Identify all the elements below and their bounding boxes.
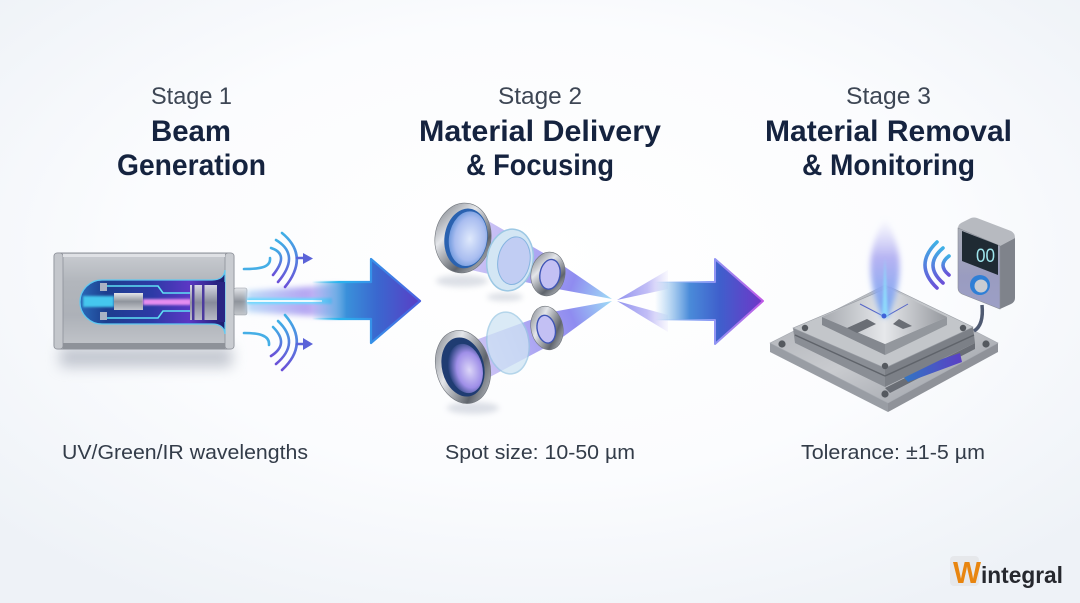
- caption: stage 2: Spot size: 10-50 µm: [445, 442, 635, 464]
- base plate: [770, 285, 998, 412]
- stage 1 heading: Beam: [151, 115, 231, 148]
- logo: Wintegral: [950, 555, 1063, 590]
- caption: stage 3: Tolerance: ±1-5 µm: [801, 442, 985, 464]
- laser cavity window: [80, 270, 225, 334]
- arrow 1: [312, 259, 420, 343]
- stage 3 heading: [765, 83, 1012, 182]
- laser housing: [54, 253, 234, 349]
- lower large lens: [428, 325, 498, 409]
- device body: [958, 218, 1015, 309]
- stage 2 heading: [419, 83, 661, 182]
- lower middle lens: [483, 309, 533, 377]
- device cable: [974, 305, 982, 331]
- stage 2 heading: Stage 2: [498, 83, 582, 110]
- stage 3 heading: Material Removal: [765, 115, 1012, 148]
- blue display strip: [900, 353, 962, 382]
- device screen: 00: [976, 246, 995, 267]
- stage 3 heading: Stage 3: [846, 83, 931, 110]
- stage 1 heading: Generation: [117, 149, 266, 182]
- focusing optics icon: [428, 199, 612, 414]
- laser housing shadow: [60, 347, 232, 367]
- material removal stage icon: [770, 218, 998, 412]
- lower small lens: [527, 303, 567, 353]
- monitoring device: [958, 218, 1015, 331]
- upper small lens: [527, 249, 569, 299]
- device knob: [970, 275, 990, 295]
- output beam: [247, 284, 345, 318]
- laser source icon: [54, 253, 247, 367]
- icon: upper wave emitter: [244, 233, 313, 287]
- lens shadows: [436, 275, 523, 414]
- upper beam path: [462, 208, 612, 299]
- middle plate: [793, 287, 975, 387]
- caption: stage 1: UV/Green/IR wavelengths: [62, 442, 308, 464]
- upper middle lens: [482, 225, 538, 295]
- stage 2 heading: & Focusing: [466, 149, 614, 182]
- gap shadow under middle plate: [885, 343, 975, 393]
- workpiece block: [822, 288, 947, 355]
- icon: lower wave emitter: [244, 315, 313, 370]
- stage 2 heading: Material Delivery: [419, 115, 661, 148]
- sensor signal waves: [925, 242, 949, 288]
- stage 3 heading: & Monitoring: [802, 149, 975, 182]
- stage 1 heading: Stage 1: [151, 83, 232, 110]
- logo: Wintegral: W: [953, 555, 982, 590]
- laser plume: [870, 218, 900, 318]
- arrow 2 with converging beams: [617, 259, 763, 344]
- stage 1 heading: [117, 83, 266, 182]
- upper large lens: [430, 199, 496, 277]
- laser nozzle: [234, 288, 247, 315]
- lower beam path: [462, 301, 612, 378]
- logo: Wintegral: integral: [981, 562, 1063, 588]
